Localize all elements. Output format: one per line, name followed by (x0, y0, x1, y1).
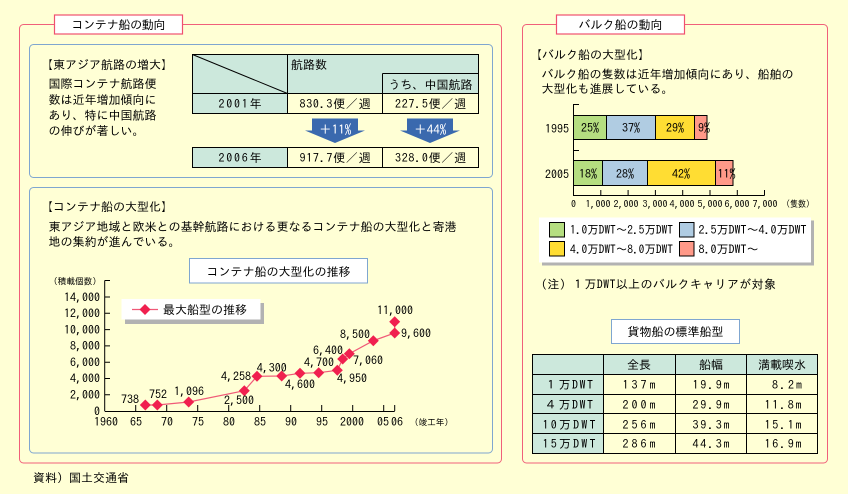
axis labels (571, 199, 814, 210)
table: route counts 2001: 2001年 (218, 97, 262, 110)
table: route counts 2006: 2006年 (218, 151, 262, 164)
axis labels: 2,000 (614, 200, 638, 210)
x axis: 2000 (340, 416, 364, 428)
panel: bulk carrier trends (522, 15, 828, 463)
legend: ship size classes: 2.5万DWT～4.0万DWT (698, 224, 806, 236)
data labels: 9,600 (401, 328, 431, 340)
x axis: 05 (377, 416, 389, 428)
data labels: 752 (149, 388, 167, 400)
text block: enlargement description (48, 220, 456, 248)
legend: ship size classes: 4.0万DWT～8.0万DWT (570, 244, 673, 256)
table: standard cargo ship sizes: 船幅 (699, 358, 723, 371)
text block: enlargement description: 東アジア地域と欧米との基幹航路における更なるコンテナ船の大型化と寄港 (48, 220, 456, 233)
table: standard cargo ship sizes: 10万DWT (542, 419, 596, 431)
data markers (140, 316, 400, 410)
table: standard cargo ship sizes: １万DWT (545, 379, 593, 391)
sub-panel: container ship enlargement (30, 188, 492, 453)
table: standard cargo ship sizes: 11.8m (764, 399, 802, 411)
table: standard cargo ship sizes: 256m (622, 419, 656, 431)
data labels: 1,096 (174, 386, 204, 398)
data labels: 7,060 (353, 354, 383, 366)
table: standard cargo ship sizes: 8.2m (772, 379, 802, 391)
data labels (121, 304, 431, 406)
axis labels: 7,000 (752, 200, 778, 210)
data labels: 8,500 (340, 328, 370, 340)
panel heading: bulk carrier trends: バルク船の動向 (578, 18, 662, 31)
y axis: 6,000 (70, 356, 100, 368)
panel heading: bulk carrier trends (556, 15, 684, 34)
bar labels: 2005 (545, 168, 569, 180)
x axis (94, 405, 453, 428)
table: route counts 2001: 航路数 (291, 58, 327, 71)
text block: bulk carrier description (542, 68, 794, 95)
table: standard cargo ship sizes (532, 354, 818, 454)
axis labels: （隻数） (782, 199, 814, 209)
table: standard cargo ship sizes: 15万DWT (542, 438, 596, 450)
sub-panel: East Asia routes (30, 44, 492, 178)
legend: ship size classes: 8.0万DWT～ (698, 244, 758, 256)
stacked bar chart: bulk fleet (545, 104, 814, 210)
table: route counts 2001: 830.3便／週 (300, 98, 370, 110)
y axis: 0 (94, 406, 100, 418)
table: route counts 2006 (192, 148, 478, 168)
legend: ship size classes: 1.0万DWT～2.5万DWT (570, 224, 673, 236)
bar labels (545, 121, 736, 180)
axis labels: 6,000 (724, 200, 750, 210)
chart title: コンテナ船の大型化の推移 (206, 265, 350, 278)
table: route counts 2006: 328.0便／週 (395, 152, 466, 164)
text block: route description: 国際コンテナ航路便 (48, 77, 156, 90)
table: standard cargo ship sizes: 200m (622, 399, 656, 411)
legend: ship size classes (539, 218, 814, 266)
panel: container ship trends (20, 15, 502, 463)
y axis: 8,000 (70, 340, 100, 352)
heading: East Asia route growth: 【東アジア航路の増大】 (41, 58, 173, 71)
table: route counts 2001 (192, 54, 478, 114)
data labels: 4,700 (304, 356, 334, 368)
bar labels: 18% (579, 167, 597, 180)
x axis: 1960 (94, 416, 118, 428)
legend (122, 299, 264, 324)
arrow: plus 11 percent: ＋11% (319, 123, 352, 136)
bar labels: 37% (622, 121, 640, 134)
table: standard cargo ship sizes: 286m (622, 438, 656, 450)
line chart: largest ship size (49, 276, 453, 428)
x axis: 70 (161, 416, 173, 428)
data line (145, 322, 395, 405)
data labels: 738 (121, 394, 139, 406)
x axis: 90 (285, 416, 297, 428)
table: standard cargo ship sizes: 満載喫水 (758, 359, 806, 371)
table: standard cargo ship sizes: 19.9m (692, 379, 730, 391)
bar labels: 1995 (545, 123, 569, 135)
y axis: 12,000 (64, 308, 100, 320)
x axis: 06 (391, 416, 403, 428)
bar labels: 11% (718, 167, 736, 180)
axis labels: 4,000 (670, 200, 694, 210)
table: standard cargo ship sizes: 137m (622, 379, 656, 391)
data labels: 4,600 (285, 378, 315, 390)
arrow: plus 44 percent (400, 118, 460, 143)
data labels: 2,500 (224, 394, 254, 406)
legend: 最大船型の推移 (163, 303, 247, 316)
y axis (49, 276, 110, 418)
table: route counts 2001: うち、中国航路 (388, 78, 472, 91)
data labels: 6,400 (313, 344, 343, 356)
data labels: 4,258 (221, 370, 251, 382)
data labels: 4,300 (257, 362, 287, 374)
text block: route description (48, 77, 156, 137)
bar labels: 29% (666, 121, 684, 134)
heading: container ship enlargement: 【コンテナ船の大型化】 (41, 200, 173, 213)
note: （注）１万DWT以上のバルクキャリアが対象 (535, 278, 776, 290)
text block: route description: の伸びが著しい。 (48, 124, 144, 137)
x axis: 80 (223, 416, 235, 428)
bar labels: 25% (581, 121, 599, 134)
text block: enlargement description: 地の集約が進んでいる。 (48, 235, 180, 248)
table: standard cargo ship sizes: 29.9m (692, 399, 730, 411)
text block: route description: あり、特に中国航路 (48, 108, 156, 122)
table title: 貨物船の標準船型 (628, 325, 724, 338)
panel heading: container ship trends: コンテナ船の動向 (72, 18, 166, 31)
axes (574, 104, 764, 196)
text block: bulk carrier description: 大型化も進展している。 (542, 83, 674, 95)
y axis: 10,000 (64, 324, 100, 336)
bar: 1995 (574, 116, 707, 140)
source note: 資料）国土交通省 (33, 472, 129, 484)
data labels: 4,950 (337, 372, 367, 384)
axis labels: 0 (571, 200, 576, 210)
y axis: （積載個数） (49, 276, 101, 286)
axis labels: 5,000 (698, 200, 722, 210)
x axis: 95 (316, 416, 328, 428)
table: standard cargo ship sizes: ４万DWT (545, 399, 593, 411)
table title (612, 320, 740, 344)
arrow: plus 44 percent: ＋44% (414, 123, 447, 136)
table: standard cargo ship sizes: 全長 (627, 359, 651, 371)
text block: route description: 数は近年増加傾向に (48, 93, 156, 106)
table: standard cargo ship sizes: 39.3m (692, 419, 730, 431)
panel heading: container ship trends (54, 15, 182, 34)
table: standard cargo ship sizes: 44.3m (692, 438, 730, 450)
axis labels: 1,000 (586, 200, 610, 210)
heading: bulk carrier enlargement: 【バルク船の大型化】 (530, 48, 650, 61)
x axis: 75 (192, 416, 204, 428)
table: standard cargo ship sizes: 15.1m (764, 419, 802, 431)
y axis: 4,000 (70, 372, 100, 384)
chart title (190, 258, 368, 283)
bar: 2005 (574, 160, 733, 186)
arrow: plus 11 percent (305, 118, 365, 143)
bar labels: 28% (616, 167, 634, 180)
y axis: 14,000 (64, 292, 100, 304)
data labels: 11,000 (377, 304, 413, 316)
bar labels: 9% (698, 121, 710, 134)
x axis: 65 (130, 416, 142, 428)
bar labels: 42% (672, 167, 690, 180)
table: route counts 2001: 227.5便／週 (395, 98, 466, 110)
table: standard cargo ship sizes: 16.9m (764, 438, 802, 450)
x axis: 85 (254, 416, 266, 428)
axis labels: 3,000 (642, 200, 668, 210)
y axis: 2,000 (70, 389, 100, 401)
table: route counts 2006: 917.7便／週 (300, 152, 370, 164)
text block: bulk carrier description: バルク船の隻数は近年増加傾向にあり、船舶の (542, 68, 794, 80)
x axis: （竣工年） (410, 418, 453, 428)
